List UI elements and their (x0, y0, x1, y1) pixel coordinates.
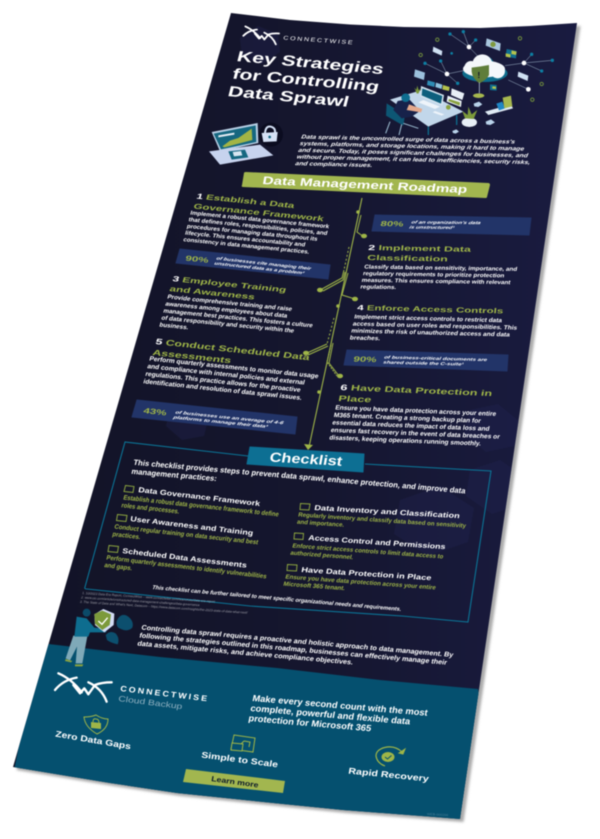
section 2 body: Classify data based on sensitivity, importance, and (364, 265, 518, 273)
checklist frame (85, 442, 491, 622)
illustration: cloud security workstation (386, 30, 554, 135)
feature: simple to scale (201, 735, 279, 770)
section 6 body: Ensure you have data protection across your entire (335, 405, 497, 418)
section 1 heading: Governance Framework (192, 203, 325, 224)
stat callout 80 percent: is unstructured¹ (408, 225, 455, 231)
illustration: cloud security workstation: ! (477, 70, 480, 80)
stat callout 90 percent (176, 249, 330, 279)
section 6 heading (338, 383, 493, 409)
checklist item: data inventory: Data Inventory and Classification (314, 503, 461, 520)
section 6 body: essential data reduces the impact of data loss and (332, 420, 490, 433)
button: learn more (183, 769, 285, 793)
title (226, 48, 386, 112)
checklist item: data governance framework: Establish a robust data governance framework to define (122, 494, 280, 519)
icon: recovery arrow and check (376, 747, 405, 766)
checklist item: scheduled assessments: Perform quarterly assessments to identify vulnerabilities (105, 554, 268, 581)
feature: rapid recovery: Rapid Recovery (348, 767, 430, 784)
section 3: employee training (158, 275, 318, 343)
stat callout 90 percent: unstructured data as a problem² (213, 261, 305, 276)
call to action statement: Make every second count with the most (252, 693, 429, 718)
section 2 heading: Classification (367, 254, 448, 264)
stat callout 90 percent: 90% (185, 255, 210, 265)
title: Data Sprawl (226, 83, 351, 110)
feature: rapid recovery (348, 747, 430, 784)
checklist note: This checklist can be further tailored to meet specific organizational needs and requirements. (152, 585, 402, 613)
stat callout 43 percent: platforms to manage their data³ (171, 415, 269, 430)
section 3 body: Provide comprehensive training and raise (166, 294, 293, 313)
section 4 body (349, 314, 520, 346)
call to action statement (248, 693, 429, 738)
checklist item: data protection (282, 565, 437, 599)
checklist item: access control (289, 534, 447, 568)
checklist heading tab (247, 447, 364, 472)
conclusion paragraph: data assets, mitigate risks, and achieve compliance objectives. (137, 640, 354, 666)
checklist item: data inventory (296, 503, 467, 537)
checklist item: data governance framework: roles and processes. (120, 502, 180, 516)
logo wordmark: CONNECTWISE (283, 35, 355, 46)
title: Key Strategies (235, 48, 386, 77)
checklist item: data protection: Have Data Protection in Place (301, 565, 433, 582)
checklist item: data inventory: Regularly inventory and classify data based on sensitivity (298, 512, 467, 530)
logo mark (243, 26, 279, 44)
section 6: data protection (329, 383, 505, 448)
stat callout 90 percent documents: shared outside the C-suite¹ (383, 360, 464, 367)
section 2: data classification (360, 244, 518, 293)
section 6 body: ensures fast recovery in the event of data breaches or (330, 427, 501, 441)
section 3 body: awareness among employees about data (164, 301, 289, 320)
heading: Data Management Roadmap (242, 172, 490, 198)
section 4: access controls (344, 304, 520, 371)
icon: shield with lock (84, 715, 108, 734)
checklist item: user awareness: practices. (111, 531, 142, 541)
heading: Data Management Roadmap: Data Management Roadmap (262, 174, 468, 196)
intro paragraph: without proper management, it can lead to inefficiencies, security risks, (296, 154, 531, 166)
section 3 body (158, 294, 318, 343)
conclusion paragraph: following the strategies outlined in this roadmap, businesses can effectively manage their (139, 632, 448, 667)
stat callout 80 percent: of an organization's data (410, 220, 482, 226)
intro paragraph: and secure. Today, it poses significant challenges for businesses, and (298, 147, 529, 159)
section 1 body: lifecycle. This ensures accountability and (184, 231, 306, 248)
feature: zero data gaps (55, 715, 132, 752)
section 2 body: regulatory requirements to prioritize protection (362, 271, 505, 279)
section 1 body: that defines roles, responsibilities, policies, and (188, 217, 328, 237)
checklist item: user awareness (111, 515, 260, 554)
checkboxes (108, 486, 310, 571)
checklist item: data governance framework: Data Governance Framework (138, 486, 261, 508)
section 5 body (142, 356, 320, 403)
checklist item: data governance framework (120, 486, 280, 526)
section 4 heading: 4 Enforce Access Controls (357, 304, 504, 316)
section 3 body: of data responsibility and security within the (160, 315, 295, 335)
stat callout 90 percent documents (344, 350, 508, 371)
roadmap spine with branches and arrow (303, 198, 367, 450)
section 5 body: and compliance with internal policies and external (146, 363, 306, 387)
call to action statement: protection for Microsoft 365 (248, 713, 372, 733)
title: for Controlling (231, 65, 381, 95)
checklist item: scheduled assessments: and gaps. (103, 562, 133, 572)
section 5 body: regulations. This practice allows for the proactive (144, 371, 302, 394)
icon: scale frames (231, 735, 255, 752)
section 1 body (182, 211, 330, 257)
document code: WEB-000206 (427, 812, 448, 817)
footnotes (80, 591, 250, 615)
section 6 heading: 6 Have Data Protection in (340, 383, 493, 398)
conclusion paragraph: Controlling data sprawl requires a proactive and holistic approach to data management. By (141, 624, 454, 659)
checklist item: data protection: Ensure you have data protection across your entire (284, 574, 437, 591)
section 6 body: M365 tenant. Creating a strong backup plan for (333, 412, 482, 425)
checklist item: user awareness: Conduct regular training on data security and best (113, 523, 260, 546)
intro paragraph: systems, platforms, and storage locations, making it hard to manage (299, 141, 525, 152)
feature: zero data gaps: Zero Data Gaps (55, 729, 132, 752)
section 5 heading: 5 Conduct Scheduled Data (154, 338, 311, 363)
section 2 body: regulations. (360, 285, 397, 291)
section 1 body: Implement a robust data governance framework (190, 211, 330, 230)
section 2 body (360, 265, 518, 293)
footnotes: 3. The State of Data and What's Next, Datacom – https://www.datacom.com/insights/the-2023-state-of-data-what-next/ (80, 600, 248, 615)
intro paragraph: and compliance issues. (295, 161, 373, 169)
feature: simple to scale: Simple to Scale (201, 750, 279, 770)
section 6 body: disasters, keeping operations running smoothly. (329, 435, 482, 448)
section 1 body: consistency in data management practices. (182, 237, 310, 256)
intro paragraph: Data sprawl is the uncontrolled surge of data across a business's (301, 134, 516, 145)
section 6 body (329, 405, 505, 448)
stat callout 43 percent: of businesses use an average of 4-6 (174, 410, 285, 426)
section 2 heading: 2 Implement Data (368, 244, 472, 254)
section 5 body: identification and resolution of data sprawl issues. (142, 378, 303, 402)
panel: checklist (85, 442, 491, 622)
section 5 heading (151, 338, 311, 374)
section 1 body: procedures for managing data throughout its (186, 224, 319, 243)
section 4 body: minimizes the risk of unauthorized access and data (351, 328, 511, 338)
call to action statement: complete, powerful and flexible data (250, 703, 412, 726)
button: learn more: Learn more (211, 775, 260, 789)
section 3 body: management best practices. This fosters a culture (162, 308, 314, 329)
stat callout 80 percent (372, 215, 531, 235)
icon: laptop and padlock (209, 123, 283, 165)
section 3 heading: 3 Employee Training (171, 275, 287, 295)
section 4 body: Implement strict access controls to restrict data (354, 314, 503, 324)
logo wordmark: CONNECTWISE (120, 684, 210, 703)
stat callout 43 percent (132, 400, 297, 434)
logo: ConnectWise header (243, 26, 355, 46)
stat callout 90 percent documents: 90% (353, 355, 378, 364)
logo mark (55, 673, 112, 702)
checklist item: scheduled assessments (103, 547, 268, 588)
checklist item: data protection: Microsoft 365 tenant. (282, 581, 346, 592)
conclusion paragraph (137, 624, 454, 675)
stat callout 80 percent: 80% (380, 220, 405, 229)
stat callout 90 percent documents: of business-critical documents are (384, 355, 488, 363)
checklist intro: management practices: (131, 467, 218, 483)
checklist item: access control: Enforce strict access controls to limit data access to (291, 543, 444, 560)
section 2 body: measures. This ensures compliance with relevant (361, 278, 511, 286)
section 1 heading (192, 193, 328, 224)
checklist heading tab: Checklist (268, 450, 344, 469)
checklist item: user awareness: User Awareness and Training (130, 515, 254, 537)
section 6 heading: Place (338, 394, 372, 405)
intro paragraph (295, 134, 536, 173)
checklist item: scheduled assessments: Scheduled Data Assessments (122, 547, 248, 570)
footnotes: 1. 10/2023 Data Era Report, ConnectWise – www.connectwise.com/resources/data-era-report (82, 591, 216, 604)
section 3 body: business. (158, 322, 190, 331)
checklist item: data inventory: and importance. (296, 519, 345, 529)
section 5 heading: Assessments (151, 349, 232, 366)
illustration: person holding shield (65, 609, 133, 666)
section 5: scheduled assessments (132, 338, 320, 434)
section 4 body: access based on user roles and responsibilities. This (352, 321, 518, 332)
section 2 heading (367, 244, 472, 264)
logo: ConnectWise Cloud Backup (55, 673, 210, 711)
logo product name: Cloud Backup (118, 694, 183, 711)
section 1 heading: 1 Establish a Data (195, 193, 296, 210)
checklist intro: This checklist provides steps to prevent data sprawl, enhance protection, and improve data (133, 458, 467, 495)
stat callout 90 percent: of businesses cite managing their (215, 256, 313, 272)
checklist item: access control: Access Control and Permissions (308, 534, 447, 551)
section 3 heading: and Awareness (168, 285, 256, 302)
section 5 body: Perform quarterly assessments to monitor data usage (148, 356, 320, 380)
stat callout 43 percent: 43% (143, 407, 168, 418)
section 4 body: breaches. (349, 335, 381, 342)
footnotes: 2. www.cio.com/article/unstructured-data-management-challenges/data-governance (81, 595, 200, 607)
section 1: data governance framework (176, 193, 330, 279)
checklist item: access control: authorized personnel. (289, 550, 354, 561)
section 3 heading (168, 275, 287, 305)
